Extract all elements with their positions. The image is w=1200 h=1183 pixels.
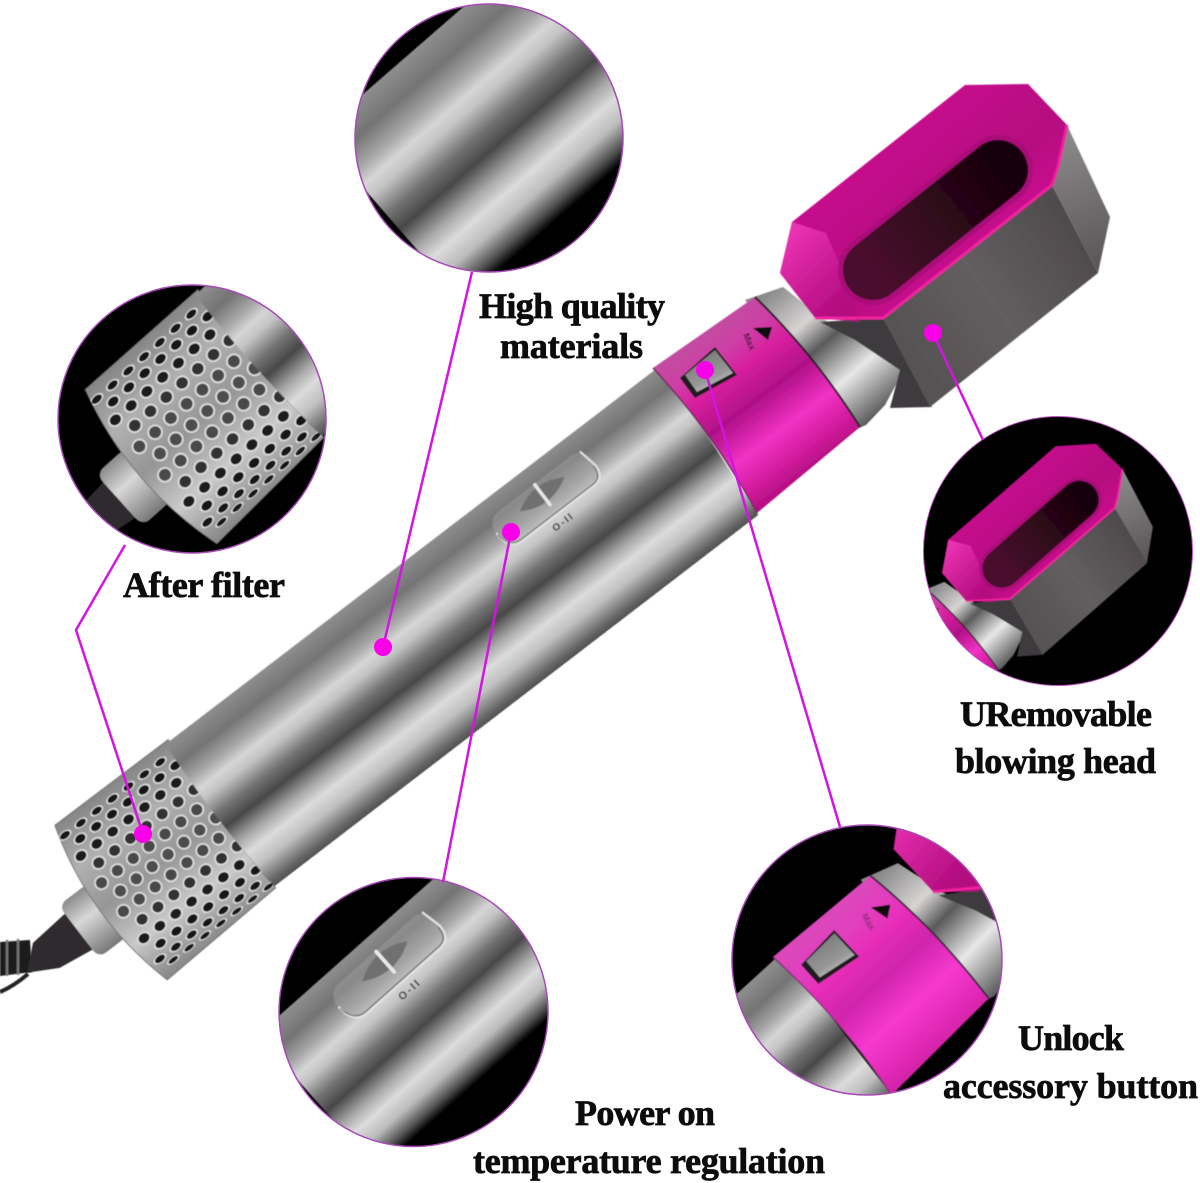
leader line: power switch [443,523,520,882]
product: hair dryer brush: Max [741,332,758,352]
callout circle: high quality materials magnified [317,0,719,302]
label: high quality materials: materials [500,326,643,366]
product: hair dryer brush: O-II [551,511,577,534]
callout circle: power switch magnified [258,856,580,1170]
label: removable blowing head: URemovable [960,694,1152,734]
leader line: accessory button [696,361,840,827]
label: unlock accessory button: accessory button [943,1066,1198,1106]
label: high quality materials [479,286,665,366]
label: power on temperature regulation: Power on [575,1093,715,1133]
callout circle: after filter magnified [0,0,821,619]
label: unlock accessory button: Unlock [1018,1018,1124,1058]
leader line: after filter [76,545,152,843]
callout circle: unlock accessory button magnified [731,824,1003,1096]
label: high quality materials: High quality [479,286,665,326]
label: removable blowing head [955,694,1156,781]
label: removable blowing head: blowing head [955,741,1156,781]
label: power on temperature regulation [473,1093,825,1181]
leader line: blowing head [924,324,983,440]
label: after filter: After filter [123,565,285,605]
label: unlock accessory button [943,1018,1198,1106]
icon: power cord rings [0,939,32,992]
callout circle: removable blowing head magnified [923,416,1193,686]
label: power on temperature regulation: temperature regulation [473,1141,825,1181]
leader line: high quality materials [374,272,472,656]
product: hair dryer brush [0,84,1110,1045]
